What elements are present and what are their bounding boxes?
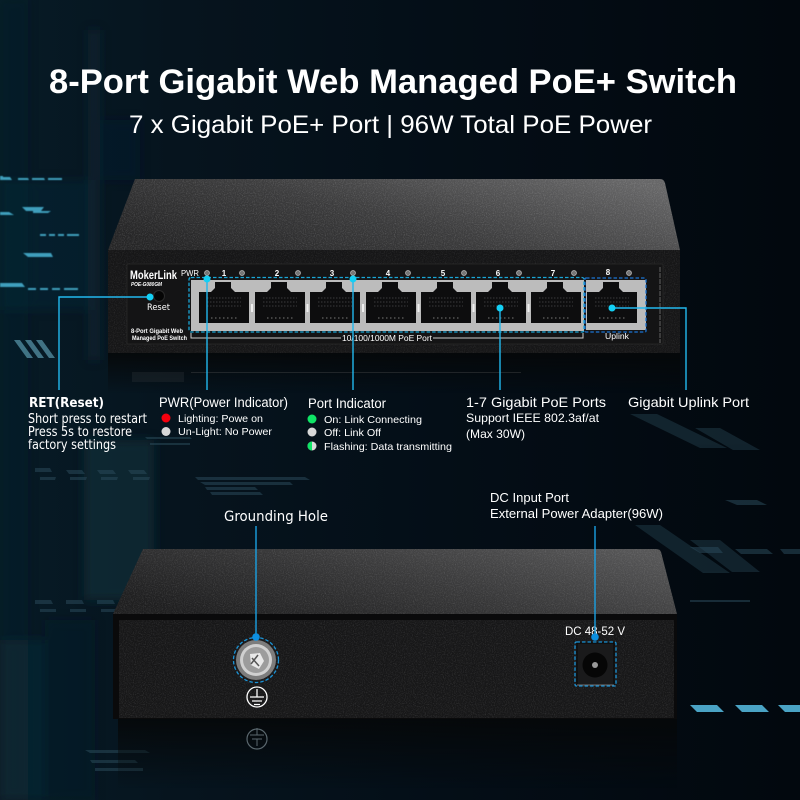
- switch front face: [108, 250, 680, 353]
- port number labels and LEDs: PWR: [181, 268, 199, 278]
- MokerLink brand: MokerLink: [130, 270, 177, 282]
- switch top face: [108, 179, 680, 250]
- dashed highlights: [189, 278, 646, 332]
- text block: PoE ports: (Max 30W): [466, 427, 525, 441]
- text block: port indicator: Off: Link Off: [324, 427, 381, 439]
- port number labels and LEDs: 7: [551, 269, 556, 278]
- reset button: [147, 290, 170, 313]
- text block: RET(Reset): Short press to restart: [28, 412, 147, 427]
- icon: earth ground symbol: [247, 687, 267, 707]
- text block: RET(Reset): [28, 395, 147, 453]
- reflection of front switch: [108, 353, 680, 393]
- label: DC input: [490, 491, 663, 521]
- speed bracket label: [191, 333, 583, 343]
- text block: PWR indicator: Un-Light: No Power: [178, 426, 273, 438]
- port number labels and LEDs: 5: [441, 269, 446, 278]
- port number labels and LEDs: 2: [275, 269, 280, 278]
- text block: port indicator: [308, 396, 452, 453]
- text block: PWR indicator: Lighting: Powe on: [178, 413, 263, 425]
- label: grounding hole: Grounding Hole: [224, 509, 328, 525]
- rear switch: [113, 549, 677, 719]
- port number labels and LEDs: 8: [606, 268, 611, 277]
- port number labels and LEDs: 3: [330, 269, 335, 278]
- port 8 uplink block: [586, 280, 646, 341]
- text block: PoE ports: 1-7 Gigabit PoE Ports: [466, 394, 606, 410]
- text block: PWR indicator: [159, 395, 288, 438]
- port number labels and LEDs: 1: [222, 269, 227, 278]
- text block: port indicator: Port Indicator: [308, 396, 386, 411]
- reflection of rear switch: [118, 718, 677, 788]
- label: DC input: External Power Adapter(96W): [490, 507, 663, 521]
- rear top face: [113, 549, 677, 614]
- text block: PoE ports: [466, 394, 606, 441]
- label: DC input: DC Input Port: [490, 491, 570, 505]
- DC jack: [575, 642, 616, 686]
- title: 8-Port Gigabit Web Managed PoE+ Switch: [49, 63, 737, 101]
- rear face: [113, 614, 677, 719]
- text block: port indicator: On: Link Connecting: [324, 414, 422, 426]
- port 8 uplink block: Uplink: [605, 331, 630, 341]
- speed bracket label: 10/100/1000M PoE Port: [342, 334, 433, 343]
- text block: RET(Reset): RET(Reset): [29, 395, 104, 411]
- DC voltage label: DC 48-52 V: [565, 624, 625, 638]
- MokerLink brand: POE-G080GM: [131, 282, 163, 288]
- MokerLink brand: 8-Port Gigabit Web: [131, 329, 183, 335]
- callout lines: front switch: [59, 279, 686, 390]
- text block: uplink port: Gigabit Uplink Port: [628, 394, 749, 410]
- reset button: Reset: [147, 303, 170, 313]
- callout lines: rear switch: [252, 526, 599, 641]
- text block: PWR indicator: PWR(Power Indicator): [159, 395, 288, 410]
- port number labels and LEDs: [181, 268, 632, 278]
- text block: PoE ports: Support IEEE 802.3af/at: [466, 411, 600, 425]
- MokerLink brand: [130, 270, 187, 342]
- port number labels and LEDs: 4: [386, 269, 391, 278]
- callout dots: [146, 276, 616, 312]
- background: glowing light streaks: [0, 176, 800, 771]
- text block: RET(Reset): factory settings: [28, 438, 116, 453]
- MokerLink brand: Managed PoE Switch: [132, 336, 187, 342]
- text block: port indicator: Flashing: Data transmitting: [324, 441, 452, 453]
- front switch: [108, 179, 680, 353]
- ports 1-7 block: [191, 280, 584, 331]
- subtitle: 7 x Gigabit PoE+ Port | 96W Total PoE Power: [129, 111, 652, 139]
- port number labels and LEDs: 6: [496, 269, 501, 278]
- text block: RET(Reset): Press 5s to restore: [28, 425, 132, 440]
- grounding screw: [234, 638, 278, 682]
